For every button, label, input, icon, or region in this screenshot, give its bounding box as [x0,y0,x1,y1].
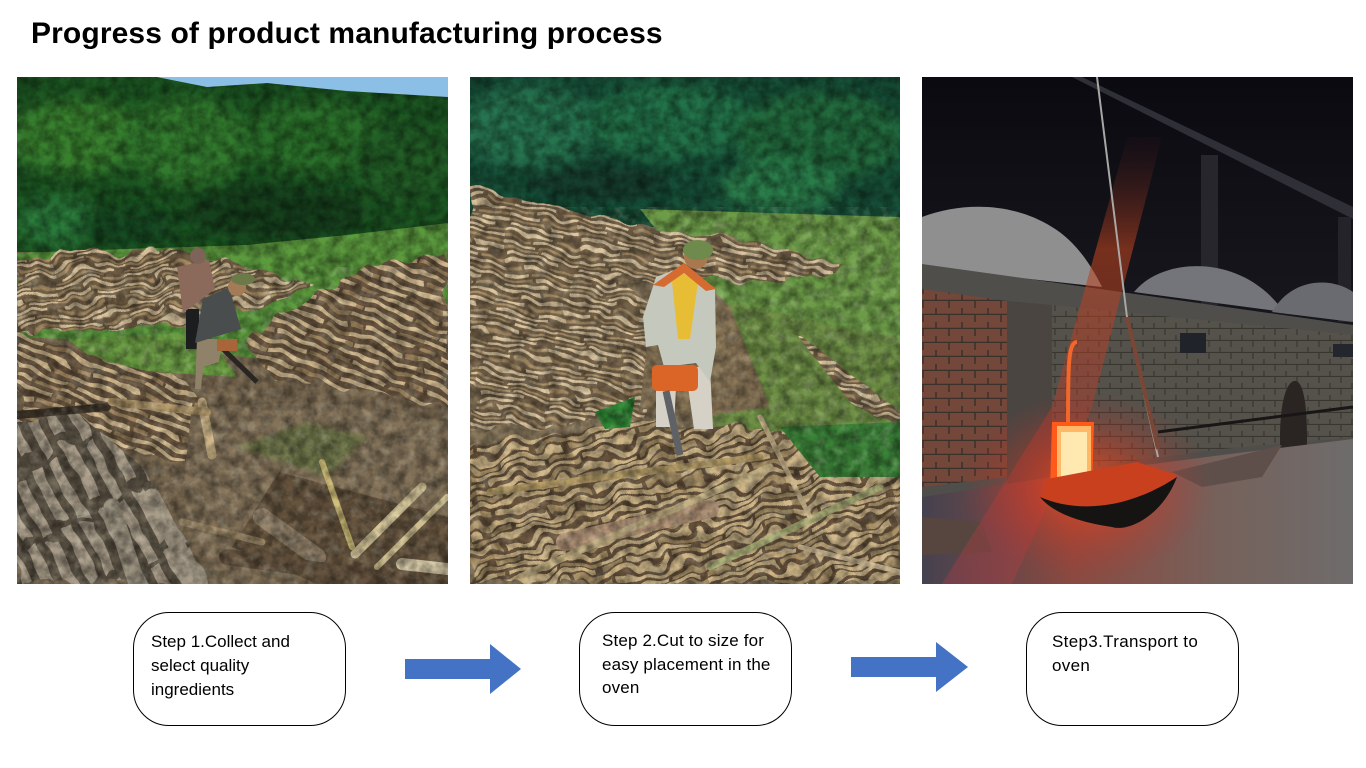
photo: glowing charcoal kiln in a brick building [922,77,1353,584]
step 1 box: select quality [151,656,249,675]
step 3 box: Step3.Transport to [1052,632,1198,651]
worker in background [177,248,215,349]
worker with chainsaw [195,273,257,389]
step 3 box: oven [1052,656,1090,675]
arrow: step 1 to step 2 [405,644,521,694]
step 1 box: Step 1.Collect and [151,632,290,651]
step 3 box [1026,612,1239,726]
photo: worker cutting logs with a chainsaw [470,77,900,584]
step 2 box: Step 2.Cut to size for [602,631,764,650]
step 1 box: ingredients [151,680,234,699]
title: Progress of product manufacturing process [31,17,663,50]
step 2 box: oven [602,678,639,697]
step 2 box: easy placement in the [602,655,771,674]
step 2 box [579,612,792,726]
step 1 box [133,612,346,726]
photo: workers selecting logs in a forest clearing [17,77,448,584]
worker with chainsaw [643,240,716,455]
arrow: step 2 to step 3 [851,642,968,692]
